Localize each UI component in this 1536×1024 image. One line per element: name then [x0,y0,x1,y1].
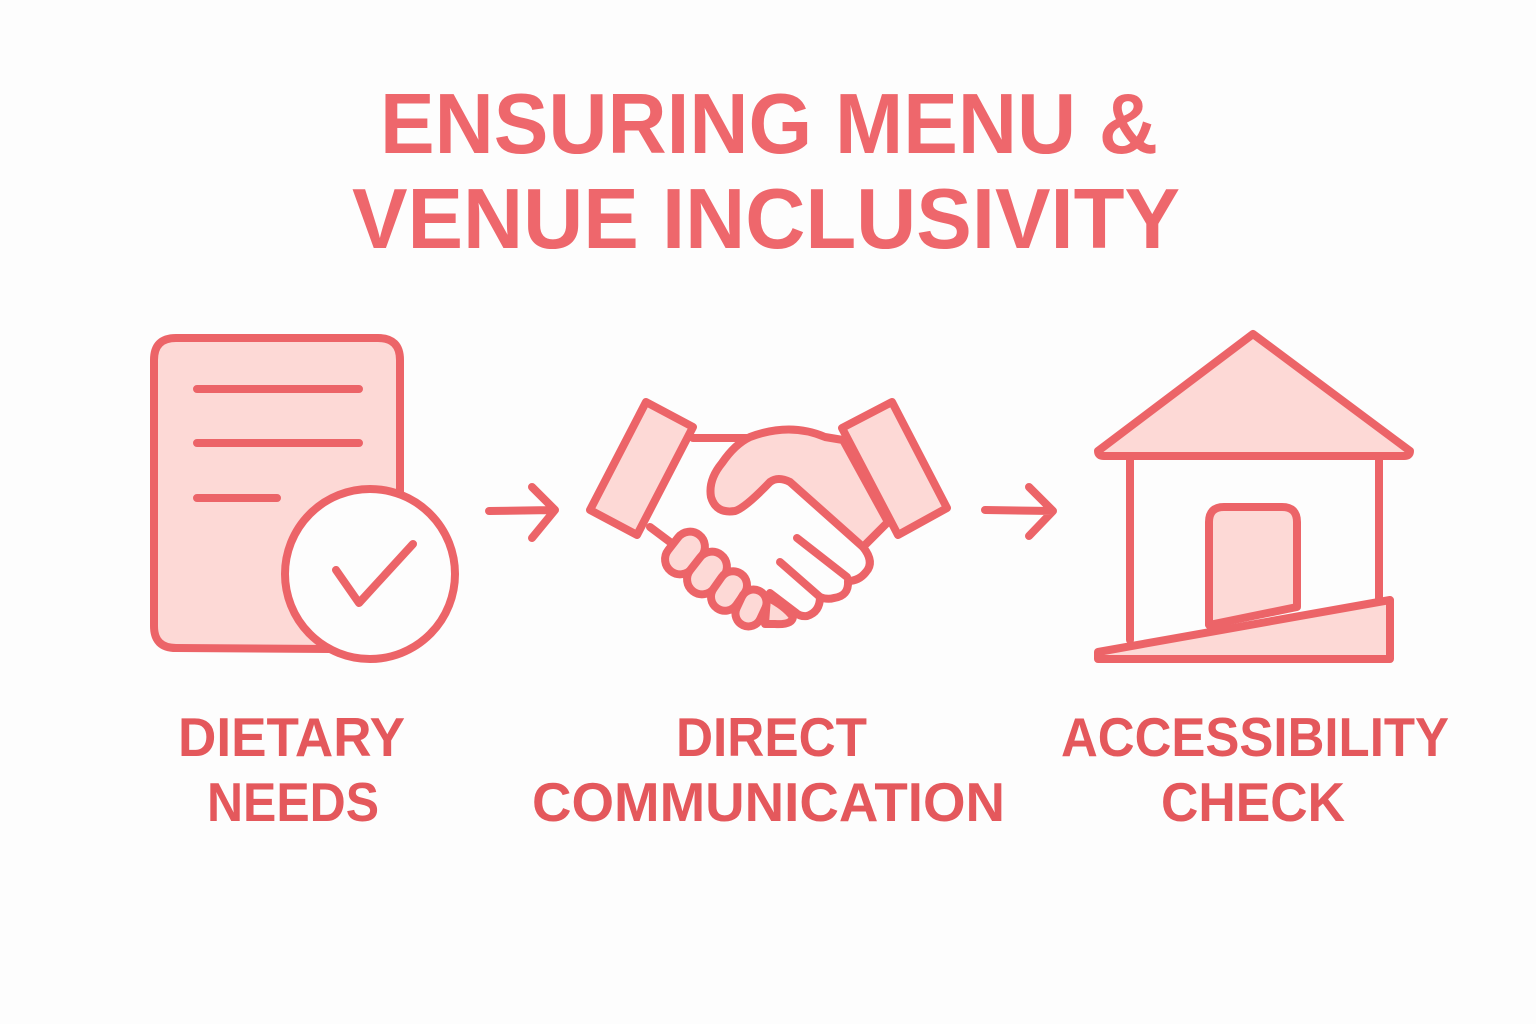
finger lines [780,538,847,597]
roof [1098,334,1410,456]
right cuff [842,402,947,535]
ramp [1098,600,1390,659]
open hand outline [770,547,870,616]
right hand [710,430,888,547]
title: VENUE INCLUSIVITY [352,172,1180,267]
label: direct communication [532,706,1005,833]
icon: accessible house [1098,334,1410,659]
arrow: second to third step [985,487,1053,536]
label: dietary needs: NEEDS [207,771,379,833]
icon: handshake [590,402,947,631]
house walls [1130,456,1379,640]
title [352,77,1180,267]
label: accessibility check: ACCESSIBILITY [1061,706,1449,768]
left fist fingers [659,526,771,631]
label: dietary needs: DIETARY [178,706,405,768]
title: ENSURING MENU & [380,77,1158,172]
check mark [336,544,413,603]
label: direct communication: DIRECT [676,706,867,768]
document text lines [197,389,359,498]
label: direct communication: COMMUNICATION [532,771,1005,833]
check badge circle [285,489,455,659]
thumb tip [765,597,793,624]
left arm lines [650,438,750,542]
door [1209,507,1297,625]
arrow: first to second step [489,487,555,538]
label: accessibility check: CHECK [1161,771,1345,833]
left cuff [590,402,693,535]
label: accessibility check [1061,706,1449,833]
icon: dietary document with check [154,338,455,659]
document page [154,338,400,649]
label: dietary needs [178,706,405,833]
